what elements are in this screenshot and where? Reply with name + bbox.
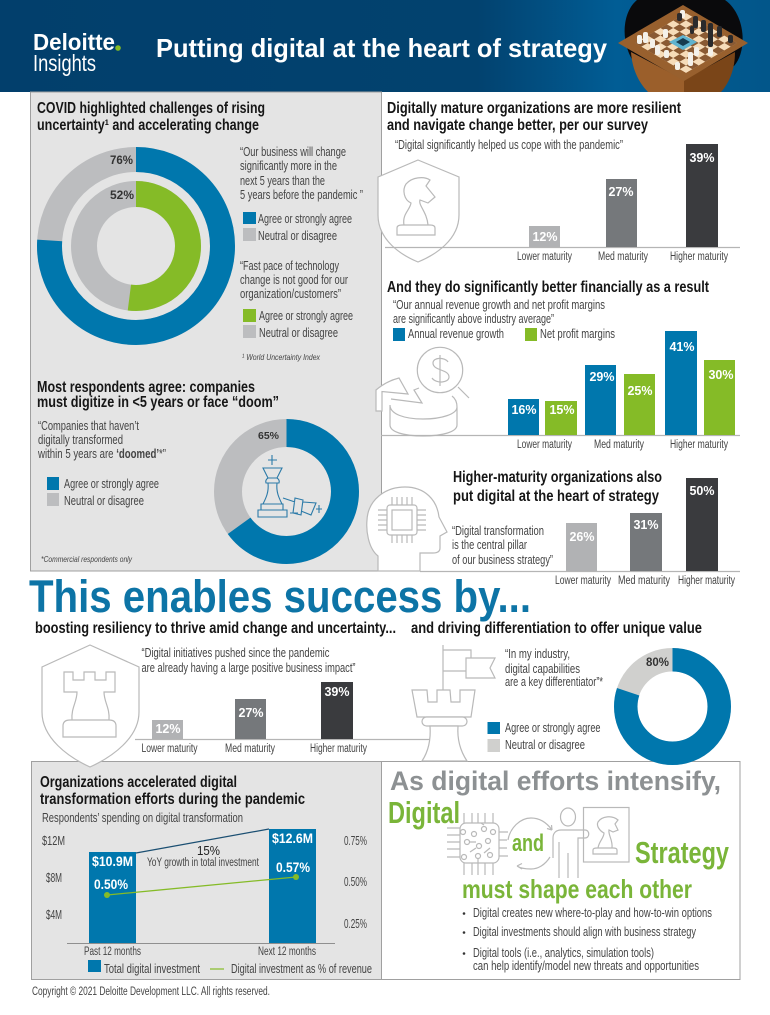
- quote: central pillar: [452, 524, 553, 567]
- heading: higher maturity: Higher-maturity organizations also: [453, 469, 662, 486]
- legend: revenue and margins: Annual revenue growth: [408, 327, 504, 341]
- section: resilience chart: [378, 100, 740, 263]
- quote: revenue growth: are significantly above industry average”: [393, 312, 554, 326]
- chart: nested donut 76% and 52%: 52%: [110, 188, 134, 202]
- chart: nested donut 76% and 52%: 76%: [110, 153, 133, 167]
- bar chart: digital central pillar: 50%: [689, 484, 715, 498]
- text block: doomed quote: within 5 years are ‘doomed’*”: [37, 447, 166, 461]
- section: digital at the heart of strategy: [367, 469, 740, 587]
- title: Putting digital at the heart of strategy: [156, 33, 608, 63]
- right axis labels: 0.50%: [344, 875, 367, 889]
- combo chart: investment bars and revenue line: Next 12 months: [258, 946, 316, 958]
- legend: doom donut: Neutral or disagree: [64, 494, 144, 508]
- heading: digital efforts intensify: As digital efforts intensify,: [390, 766, 721, 796]
- icon: cycle arrows: [508, 818, 552, 869]
- bullet list: can help identify/model new threats and opportunities: [473, 959, 699, 973]
- bar chart: revenue and margins by maturity: Lower maturity: [517, 439, 572, 451]
- combo chart: investment bars and revenue line: Past 12 months: [84, 946, 141, 958]
- legend: differentiator donut: Agree or strongly agree: [505, 721, 601, 735]
- bullet list: Digital investments should align with business strategy: [473, 925, 697, 939]
- section: financial performance: [376, 279, 740, 451]
- quote: central pillar: is the central pillar: [452, 538, 527, 552]
- left axis labels: [42, 834, 65, 922]
- icon: head with chip: [367, 487, 447, 571]
- text block: technology pace quote: change is not good for our: [240, 273, 348, 287]
- right axis labels: 0.75%: [344, 834, 367, 848]
- text block: technology pace quote: [240, 259, 348, 301]
- bar chart: positive business impact: Lower maturity: [142, 743, 198, 755]
- legend: inner donut: [243, 309, 353, 340]
- header banner: [0, 0, 770, 92]
- footnote: world uncertainty index: ¹ World Uncertainty Index: [242, 352, 321, 362]
- chart: doom donut 65%: [228, 430, 345, 550]
- combo chart: investment bars and revenue line: $10.9M: [92, 854, 133, 869]
- heading: higher maturity: put digital at the heart of strategy: [453, 488, 659, 505]
- left axis labels: $12M: [42, 834, 65, 848]
- panel: digital and strategy background: [382, 762, 740, 980]
- label: Digital: Digital: [388, 795, 460, 830]
- icon: presenter with knight board: [553, 808, 629, 878]
- label: Strategy: Strategy: [635, 835, 730, 870]
- icon: coin and magnifier: [376, 347, 469, 436]
- left axis labels: $4M: [46, 908, 62, 922]
- bar chart: revenue and margins by maturity: [508, 331, 735, 451]
- text block: technology pace quote: organization/customers”: [240, 287, 341, 301]
- legend: doom donut: [47, 477, 159, 508]
- legend: revenue and margins: [393, 327, 615, 341]
- bar chart: revenue and margins by maturity: 25%: [627, 384, 653, 398]
- panel: COVID and doom (grey background): [30, 92, 382, 571]
- legend: differentiator donut: Neutral or disagree: [505, 738, 585, 752]
- bar chart: digital central pillar: Lower maturity: [555, 575, 611, 587]
- chart: differentiator donut 80%: 80%: [646, 655, 669, 669]
- heading: most respondents agree: must digitize in <5 years or face “doom”: [37, 394, 279, 411]
- bar chart: positive business impact: Med maturity: [225, 743, 275, 755]
- heading: organizations accelerated: [40, 774, 305, 808]
- quote: coping with pandemic: “Digital significantly helped us cope with the pandemic”: [395, 138, 623, 152]
- chart: differentiator donut 80%: [626, 655, 719, 753]
- quote: key differentiator: [505, 647, 603, 689]
- bar chart: revenue and margins by maturity: 41%: [669, 340, 695, 354]
- bar chart: revenue and margins by maturity: 30%: [708, 368, 734, 382]
- subheading: boosting resiliency: boosting resiliency to thrive amid change and uncertainty...: [35, 620, 396, 637]
- text block: doomed quote: [37, 419, 166, 461]
- legend: doom donut: Agree or strongly agree: [64, 477, 159, 491]
- bar chart: positive business impact: 12%: [155, 722, 181, 736]
- heading: COVID highlighted challenges: COVID highlighted challenges of rising: [37, 100, 265, 117]
- section: digital and strategy shape each other: [388, 766, 730, 973]
- big heading: this enables success: This enables success by...: [29, 571, 531, 622]
- icon: chess board: [618, 0, 748, 92]
- combo chart: investment bars and revenue line: [67, 829, 335, 958]
- text block: doomed quote: “Companies that haven’t: [38, 419, 139, 433]
- legend: investment: [88, 960, 372, 976]
- bar chart: digital central pillar: 26%: [569, 530, 595, 544]
- icon: rook with flag: [412, 645, 495, 761]
- legend: differentiator donut: [488, 721, 601, 752]
- bar chart: positive business impact: 39%: [324, 685, 350, 699]
- bar chart: revenue and margins by maturity: 29%: [589, 370, 615, 384]
- quote: revenue growth: [393, 298, 605, 326]
- combo chart: investment bars and revenue line: 0.57%: [276, 860, 310, 875]
- Deloitte Insights logo: Deloitte: [33, 29, 115, 55]
- icon: shield with knight: [378, 160, 459, 262]
- text block: business change quote: “Our business will change: [240, 145, 346, 159]
- bar chart: digital central pillar: 31%: [633, 518, 659, 532]
- panel: spending chart background: [32, 762, 382, 980]
- text block: business change quote: [240, 145, 363, 202]
- combo chart: investment bars and revenue line: 0.50%: [94, 877, 128, 892]
- bar chart: coped with pandemic: Lower maturity: [517, 251, 572, 263]
- heading: organizations accelerated: transformation efforts during the pandemic: [40, 791, 305, 808]
- bar chart: digital central pillar: [555, 478, 735, 587]
- bar chart: positive business impact: [142, 682, 367, 755]
- heading: COVID highlighted challenges: uncertainty¹ and accelerating change: [37, 117, 259, 134]
- text block: doomed quote: digitally transformed: [38, 433, 123, 447]
- heading: digitally mature: [387, 100, 681, 134]
- Deloitte Insights logo: Insights: [33, 50, 96, 76]
- bar chart: revenue and margins by maturity: Med maturity: [594, 439, 644, 451]
- bar chart: digital central pillar: Higher maturity: [678, 575, 735, 587]
- Deloitte Insights logo: [33, 29, 121, 76]
- bar chart: revenue and margins by maturity: Higher maturity: [670, 439, 728, 451]
- heading: digitally mature: and navigate change better, per our survey: [387, 117, 648, 134]
- label: must shape each other: must shape each other: [462, 874, 692, 904]
- bullet list: [463, 906, 712, 973]
- quote: key differentiator: digital capabilities: [505, 662, 580, 676]
- icon: toppled king: [258, 455, 322, 517]
- legend: inner donut: Agree or strongly agree: [259, 309, 353, 323]
- quote: central pillar: “Digital transformation: [452, 524, 544, 538]
- right axis labels: 0.25%: [344, 917, 367, 931]
- legend: outer donut: Neutral or disagree: [258, 229, 337, 243]
- heading: higher maturity: [453, 469, 662, 505]
- heading: most respondents agree: Most respondents agree: companies: [37, 379, 255, 396]
- heading: financial results: And they do significantly better financially as a result: [387, 279, 709, 296]
- heading: organizations accelerated: Organizations accelerated digital: [40, 774, 237, 791]
- subheading: driving differentiation: and driving differentiation to offer unique value: [411, 620, 702, 637]
- label: and: and: [512, 830, 544, 857]
- chart: doom donut 65%: 65%: [258, 430, 280, 442]
- section: accelerated digital transformation: [40, 774, 372, 976]
- legend: outer donut: Agree or strongly agree: [258, 212, 352, 226]
- copyright: Copyright © 2021 Deloitte Development LLC. All rights reserved.: [32, 986, 270, 998]
- chart: nested donut 76% and 52%: [50, 153, 222, 332]
- bullet list: Digital tools (i.e., analytics, simulation tools): [473, 946, 654, 960]
- quote: revenue growth: “Our annual revenue growth and net profit margins: [393, 298, 605, 312]
- text block: business change quote: 5 years before the pandemic ”: [240, 188, 363, 202]
- left axis labels: $8M: [46, 871, 62, 885]
- quote: key differentiator: “In my industry,: [505, 647, 570, 661]
- footnote: commercial respondents: *Commercial respondents only: [41, 554, 133, 564]
- text block: business change quote: significantly more in the: [240, 159, 337, 173]
- quote: key differentiator: are a key differentiator”*: [505, 675, 603, 689]
- bar chart: coped with pandemic: 27%: [608, 185, 634, 199]
- bar chart: coped with pandemic: [517, 144, 728, 263]
- bar chart: digital central pillar: Med maturity: [618, 575, 670, 587]
- legend: investment: Total digital investment: [104, 962, 200, 976]
- heading: COVID highlighted challenges: [37, 100, 265, 134]
- right axis labels: [344, 834, 367, 931]
- bar chart: coped with pandemic: Higher maturity: [670, 251, 728, 263]
- combo chart: investment bars and revenue line: $12.6M: [272, 831, 313, 846]
- subtitle: respondents spending: Respondents’ spending on digital transformation: [42, 811, 243, 825]
- legend: investment: Digital investment as % of revenue: [231, 962, 372, 976]
- legend: inner donut: Neutral or disagree: [259, 326, 338, 340]
- quote: digital initiatives: are already having a large positive business impact”: [142, 661, 356, 675]
- heading: most respondents agree: [37, 379, 279, 411]
- bar chart: coped with pandemic: 12%: [532, 230, 558, 244]
- quote: digital initiatives: [142, 646, 356, 675]
- heading: digitally mature: Digitally mature organizations are more resilient: [387, 100, 681, 117]
- bar chart: positive business impact: 27%: [238, 706, 264, 720]
- legend: revenue and margins: Net profit margins: [540, 327, 615, 341]
- legend: outer donut: [243, 212, 352, 243]
- text block: technology pace quote: “Fast pace of technology: [240, 259, 340, 273]
- combo chart: investment bars and revenue line: 15%: [197, 843, 220, 858]
- combo chart: investment bars and revenue line: YoY growth in total investment: [147, 857, 260, 869]
- quote: digital initiatives: “Digital initiatives pushed since the pandemic: [142, 646, 330, 660]
- bar chart: coped with pandemic: 39%: [689, 151, 715, 165]
- quote: central pillar: of our business strategy”: [452, 553, 553, 567]
- icon: circuit chip: [447, 813, 508, 875]
- bar chart: revenue and margins by maturity: 16%: [511, 403, 537, 417]
- bar chart: positive business impact: Higher maturity: [310, 743, 367, 755]
- icon: shield with rook: [42, 645, 139, 767]
- bar chart: coped with pandemic: Med maturity: [598, 251, 648, 263]
- bar chart: revenue and margins by maturity: 15%: [549, 403, 575, 417]
- text block: business change quote: next 5 years than the: [240, 174, 325, 188]
